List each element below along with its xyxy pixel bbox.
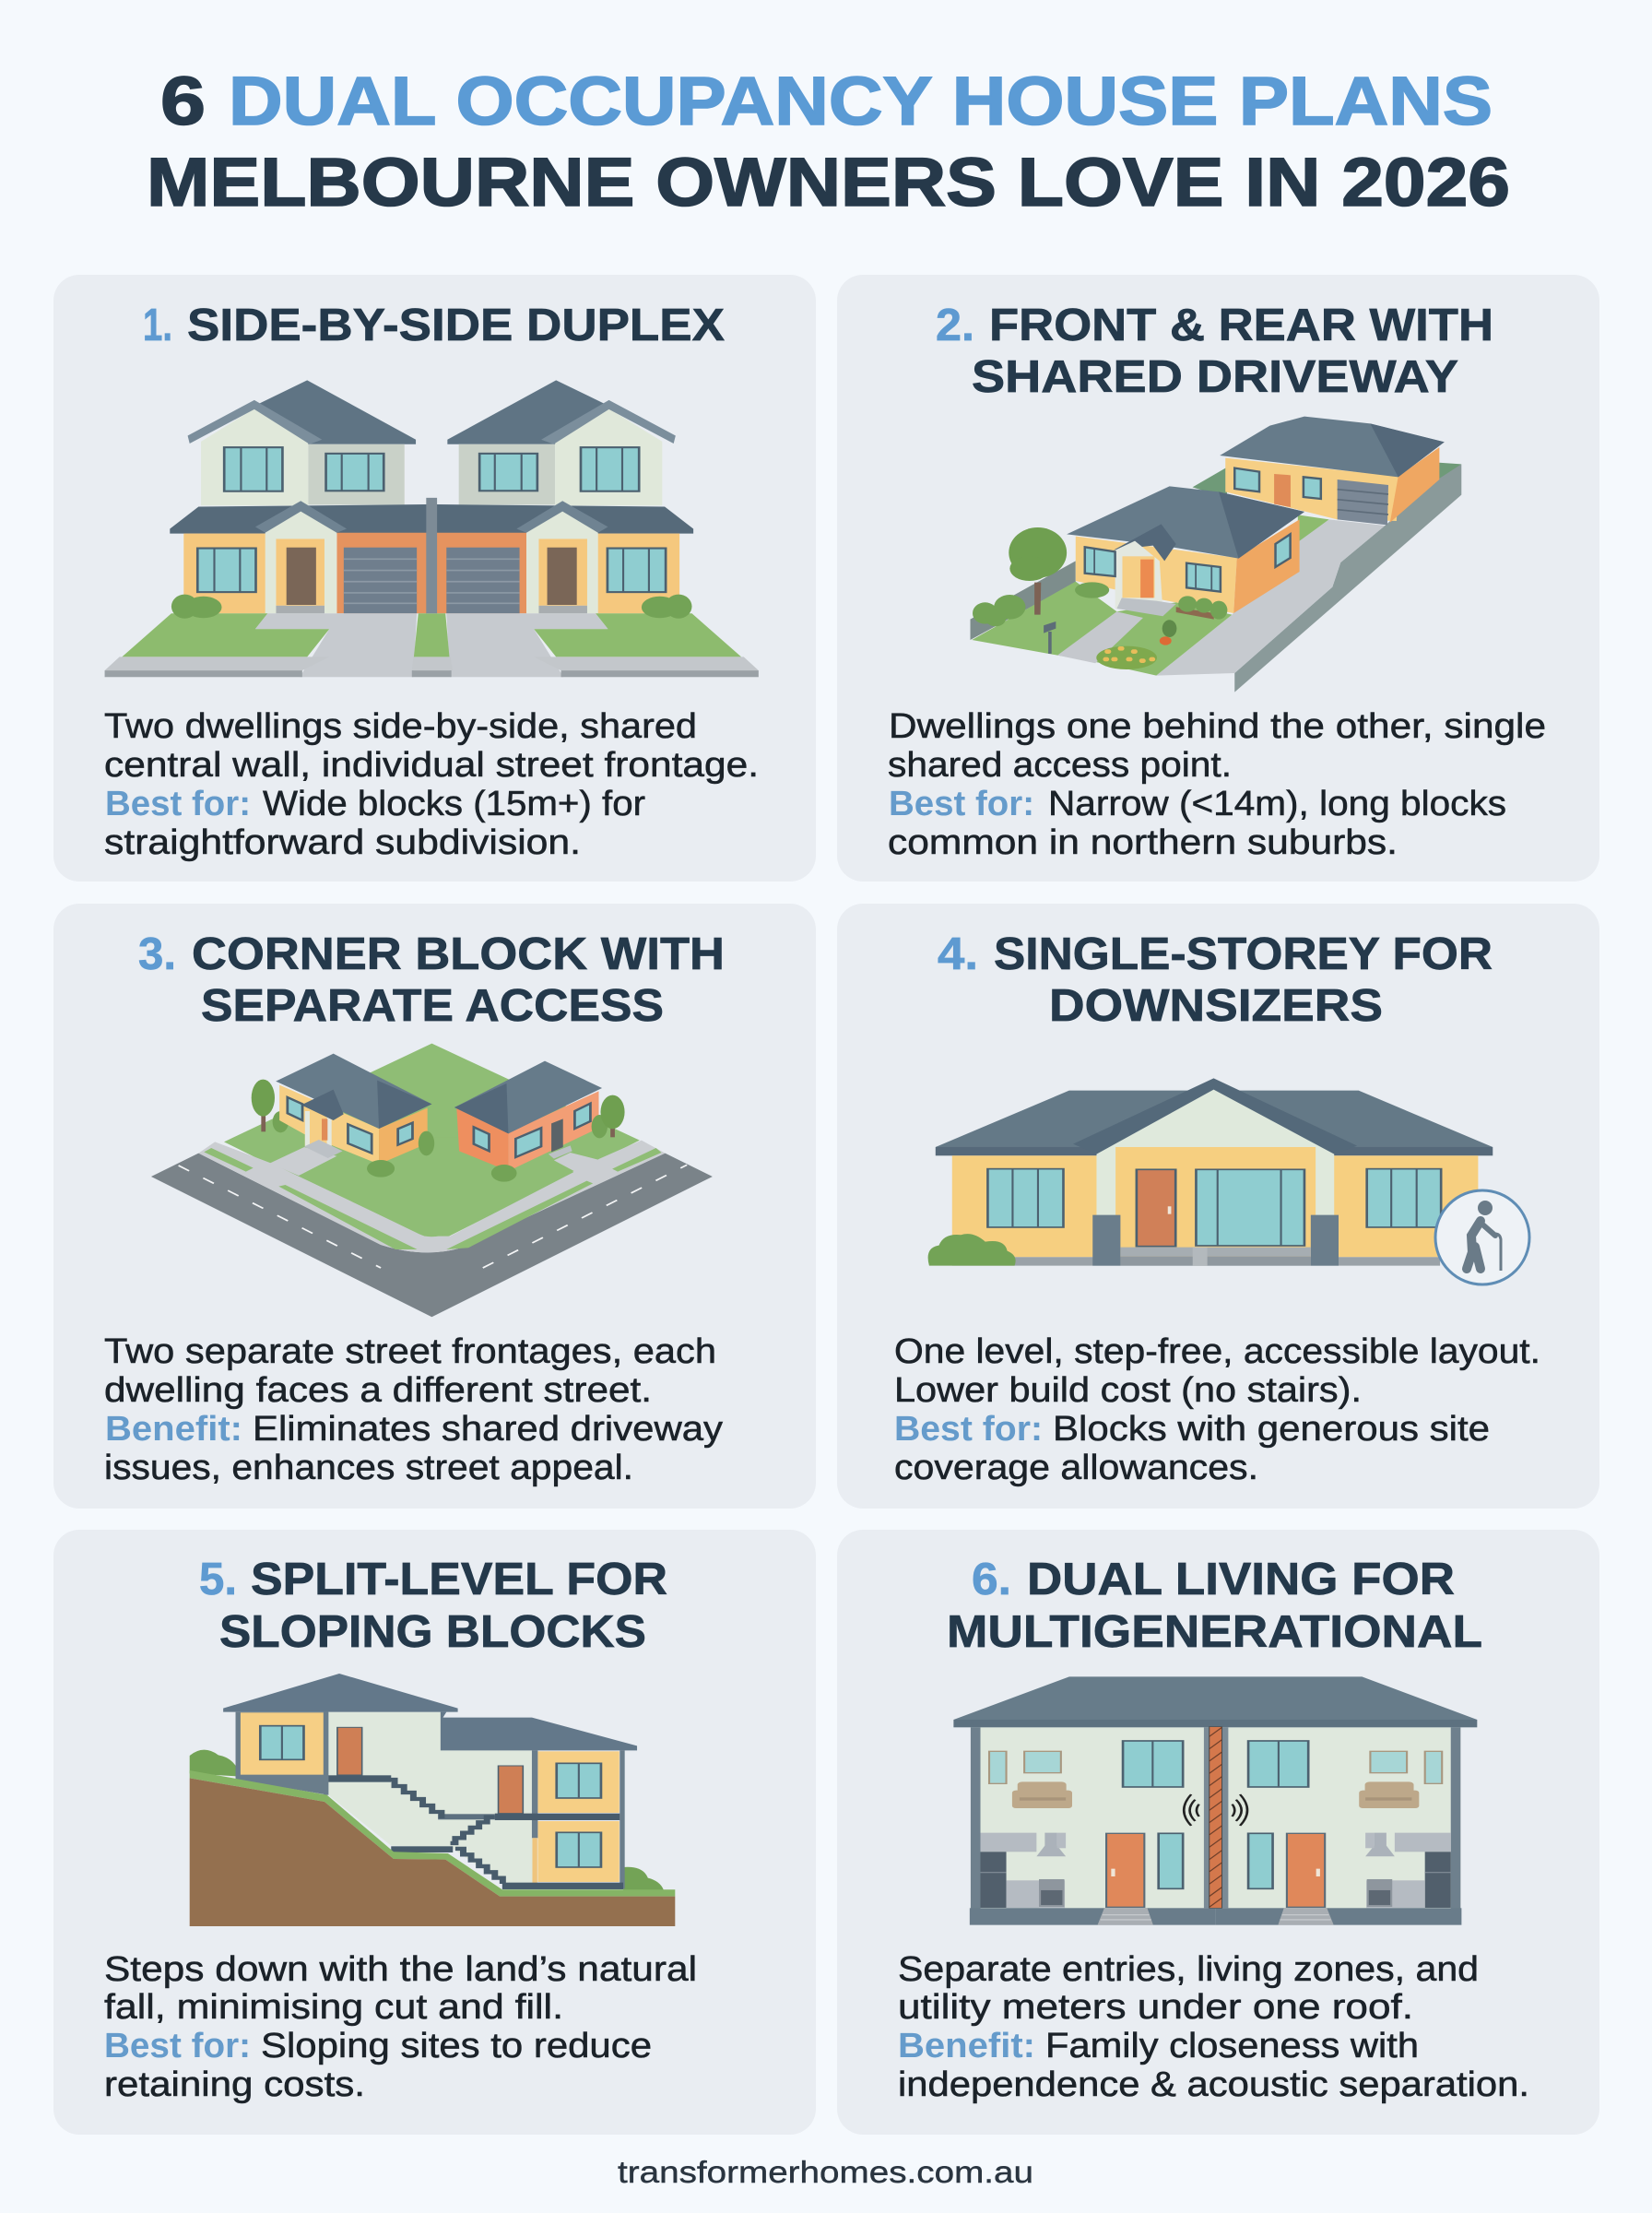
panel: side-by-side duplex [53,275,816,882]
heading: corner block: 3. [138,929,176,979]
illustration: front and rear houses [970,417,1461,692]
text: dual living description: utility meters under one roof. [898,1988,1413,2027]
heading: single storey: DOWNSIZERS [1049,981,1383,1031]
text: corner block description: dwelling faces a different street. [104,1371,652,1410]
text: side-by-side description: Best for: [105,785,251,823]
text: corner block description [104,1332,723,1487]
text: side-by-side description: central wall, individual street frontage. [104,746,759,785]
heading: front and rear: FRONT & REAR WITH [989,301,1493,350]
left house [252,1054,434,1178]
tree and garden [973,527,1227,669]
heading: split level [199,1555,667,1657]
text: single storey description: coverage allowances. [894,1449,1258,1487]
heading: side-by-side duplex: 1. [143,301,172,350]
heading: corner block: CORNER BLOCK WITH [192,929,725,979]
text: front and rear description: Best for: [889,785,1034,823]
heading: split level: SLOPING BLOCKS [219,1607,646,1657]
text: split level description: Best for: [104,2027,251,2065]
text: dual living description: Family closeness with [1045,2027,1419,2065]
text: dual living description [898,1950,1529,2104]
panel: single storey [837,904,1599,1509]
text: split level description: Steps down with the land’s natural [104,1950,697,1989]
text: front and rear description: common in northern suburbs. [888,823,1398,862]
text: split level description: fall, minimising cut and fill. [104,1988,563,2027]
panel: front and rear [837,275,1599,882]
text: corner block description: Benefit: [105,1410,242,1449]
panel: corner block [53,904,816,1509]
heading: split level: 5. [199,1555,237,1604]
heading: front and rear: 2. [936,301,974,350]
panel: dual living [837,1530,1599,2135]
right house [454,1061,625,1182]
text: single storey description: One level, step-free, accessible layout. [894,1332,1540,1371]
heading: front and rear [936,301,1493,402]
text: front and rear description: shared access point. [888,746,1232,785]
text: split level description: Sloping sites to reduce [261,2027,652,2065]
icon: elderly person badge [1435,1190,1529,1284]
text: corner block description: Two separate street frontages, each [104,1332,716,1371]
heading: dual living: DUAL LIVING FOR [1027,1555,1455,1604]
heading: dual living: MULTIGENERATIONAL [947,1607,1482,1657]
heading: front and rear: SHARED DRIVEWAY [972,352,1458,402]
text: dual living description: independence & acoustic separation. [898,2065,1529,2104]
front dwelling [1067,486,1304,616]
heading: split level: SPLIT-LEVEL FOR [251,1555,667,1604]
heading: single storey: 4. [938,929,978,979]
heading: side-by-side duplex: SIDE-BY-SIDE DUPLEX [187,301,725,350]
text: dual living description: Separate entries, living zones, and [898,1950,1479,1989]
illustration: multigenerational dual living house [953,1676,1477,1925]
heading: dual living [947,1555,1482,1657]
illustration: duplex houses [105,380,759,677]
heading: corner block [138,929,725,1031]
heading: single storey: SINGLE-STOREY FOR [994,929,1493,979]
text: split level description: retaining costs. [104,2065,365,2104]
text: split level description [104,1950,697,2104]
text: single storey description: Best for: [894,1410,1043,1449]
rear dwelling [1220,417,1445,525]
heading: corner block: SEPARATE ACCESS [201,981,664,1031]
text: single storey description: Blocks with generous site [1053,1410,1490,1449]
text: side-by-side description: straightforward subdivision. [104,823,581,862]
title [147,63,1510,220]
title: MELBOURNE OWNERS LOVE IN 2026 [147,144,1510,220]
illustration: corner block houses [151,1044,713,1317]
text: corner block description: issues, enhances street appeal. [104,1449,633,1487]
text: front and rear description [888,707,1546,862]
text: corner block description: Eliminates shared driveway [253,1410,723,1449]
text: side-by-side description [104,707,759,862]
illustration: single-storey house [928,1078,1493,1266]
heading: single storey [938,929,1493,1031]
text: single storey description: Lower build cost (no stairs). [894,1371,1362,1410]
panel: split level [53,1530,816,2135]
title: 6 [160,63,206,139]
text: front and rear description: Narrow (<14m), long blocks [1048,785,1506,823]
title: DUAL OCCUPANCY HOUSE PLANS [229,63,1493,139]
text: single storey description [894,1332,1540,1487]
footer: website: transformerhomes.com.au [618,2155,1033,2189]
text: side-by-side description: Two dwellings side-by-side, shared [104,707,697,746]
illustration: split-level house on slope [190,1674,675,1926]
heading: dual living: 6. [972,1555,1011,1604]
text: dual living description: Benefit: [898,2027,1035,2065]
text: front and rear description: Dwellings one behind the other, single [889,707,1546,746]
text: side-by-side description: Wide blocks (15m+) for [263,785,645,823]
